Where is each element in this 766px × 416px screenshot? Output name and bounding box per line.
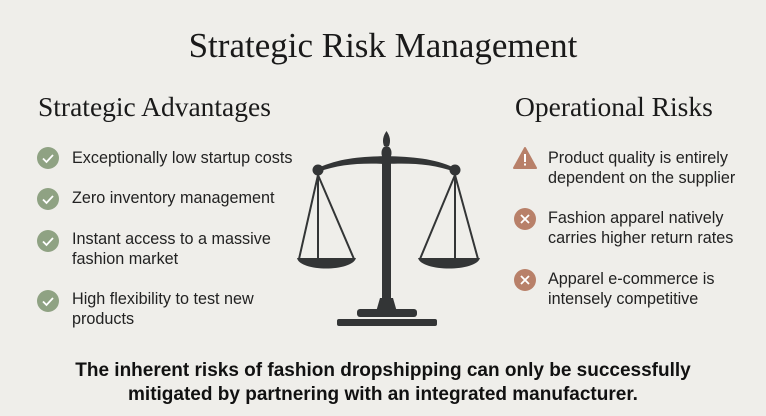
panel: risks — [513, 147, 735, 308]
item 3: fashion market — [72, 250, 178, 268]
heading: strategic advantages: Strategic Advantages — [38, 91, 271, 122]
risk 2 — [514, 208, 733, 247]
item 4 — [37, 290, 254, 328]
title: Strategic Risk Management — [189, 26, 577, 65]
item 2 — [37, 188, 274, 210]
risk 2: carries higher return rates — [548, 229, 733, 247]
item 4: products — [72, 310, 134, 328]
conclusion text: The inherent risks of fashion dropshipping can only be successfully — [75, 360, 691, 381]
conclusion text — [75, 360, 691, 405]
risk 2: Fashion apparel natively — [548, 209, 723, 227]
icon: balance scale — [297, 131, 480, 326]
item 4: High flexibility to test new — [72, 290, 254, 308]
item 2: Zero inventory management — [72, 189, 274, 207]
risk 1: Product quality is entirely — [548, 149, 728, 167]
conclusion text: mitigated by partnering with an integrated manufacturer. — [128, 384, 638, 405]
item 1: Exceptionally low startup costs — [72, 149, 292, 167]
risk 3 — [514, 269, 714, 308]
heading: operational risks: Operational Risks — [515, 91, 713, 122]
risk 1: dependent on the supplier — [548, 169, 735, 187]
risk 3: Apparel e-commerce is — [548, 270, 714, 288]
risk 3: intensely competitive — [548, 290, 698, 308]
item 3 — [37, 230, 271, 268]
item 3: Instant access to a massive — [72, 230, 271, 248]
risk 1 — [513, 147, 735, 187]
panel: advantages — [37, 147, 292, 328]
